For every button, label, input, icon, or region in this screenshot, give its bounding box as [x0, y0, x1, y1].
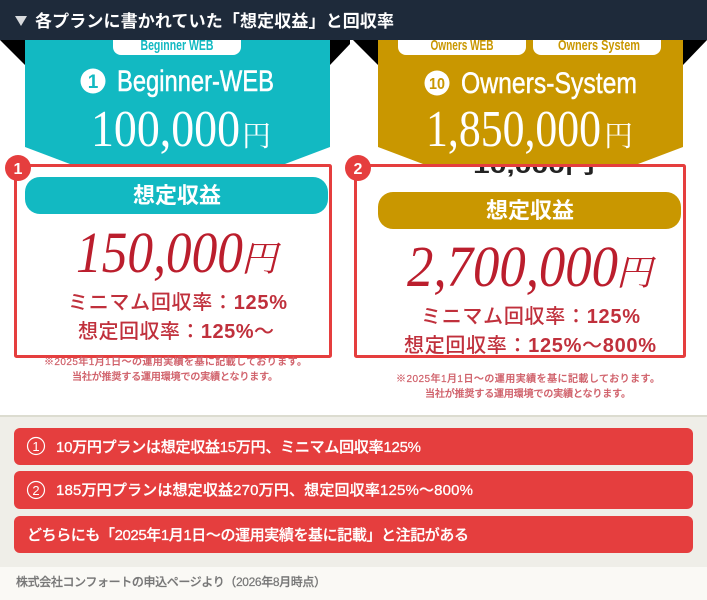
expected income figure: 150,000: [76, 220, 243, 285]
minimum recovery rate: ミニマム回収率：125%: [68, 291, 287, 314]
tab: Owners System: Owners System: [558, 37, 640, 54]
panel: summary background: [0, 415, 707, 567]
title: 各プランに書かれていた「想定収益」と回収率: [35, 11, 394, 31]
minimum recovery rate: ミニマム回収率：125%: [421, 305, 640, 328]
panel: callout 1 expected income: [16, 166, 330, 356]
plan name: Beginner-WEB: [117, 65, 274, 98]
header bar: [0, 0, 707, 40]
tab: Beginner WEB: Beginner WEB: [140, 37, 214, 54]
pill heading: [378, 192, 681, 229]
plan price: 1,850,000: [426, 101, 601, 158]
panel: Owners-System plan: [378, 37, 683, 164]
icon: number 10: 10: [429, 76, 445, 93]
yen unit: 円: [242, 121, 271, 153]
badge 2: [345, 155, 371, 181]
summary row 1: 10万円プランは想定収益15万円、ミニマム回収率125%: [56, 439, 421, 456]
panel: callout 2 expected income: [356, 166, 684, 357]
pill heading: [25, 177, 328, 214]
note left: ※2025年1月1日～の運用実績を基に記載しております。: [44, 355, 307, 368]
icon: down triangle: [15, 16, 27, 26]
summary row 3: [14, 516, 693, 553]
yen unit: 円: [616, 253, 657, 293]
panel: Beginner-WEB plan: [25, 37, 330, 164]
pill heading: 想定収益: [486, 198, 574, 223]
note left: [44, 355, 307, 383]
badge 1: 1: [14, 161, 23, 178]
summary row 1: 1: [32, 439, 40, 454]
yen unit: 円: [241, 239, 282, 279]
tab: Owners WEB: Owners WEB: [430, 37, 494, 54]
pill heading: 想定収益: [133, 183, 221, 208]
summary row 1: [14, 428, 693, 465]
icon: number 10: [424, 70, 450, 96]
clipped text remnant: 10,000円: [473, 153, 595, 178]
badge 2: 2: [354, 161, 363, 178]
summary row 3: どちらにも「2025年1月1日～の運用実績を基に記載」と注記がある: [27, 526, 469, 544]
icon: number 1: [80, 68, 106, 94]
note right: [396, 372, 660, 400]
icon: number 1: 1: [88, 72, 99, 93]
expected recovery rate: 想定回収率：125%～800%: [404, 334, 656, 357]
plan price: 100,000: [91, 101, 240, 158]
expected income figure: 2,700,000: [407, 234, 618, 299]
source footer: 株式会社コンフォートの申込ページより（2026年8月時点）: [16, 574, 326, 589]
tab: Owners WEB: [398, 37, 526, 55]
source footer: [0, 567, 707, 600]
black corner ribbons: [0, 40, 707, 65]
badge 1: [5, 155, 31, 181]
note right: ※2025年1月1日～の運用実績を基に記載しております。: [396, 372, 660, 385]
plan name: Owners-System: [461, 67, 637, 100]
expected recovery rate: 想定回収率：125%～: [78, 320, 274, 343]
note right: 当社が推奨する運用環境での実績となります。: [425, 387, 631, 400]
yen unit: 円: [604, 121, 633, 153]
summary row 2: 2: [32, 483, 40, 498]
summary row 2: [14, 471, 693, 509]
summary row 2: 185万円プランは想定収益270万円、想定回収率125%～800%: [56, 482, 473, 499]
note left: 当社が推奨する運用環境での実績となります。: [72, 370, 278, 383]
